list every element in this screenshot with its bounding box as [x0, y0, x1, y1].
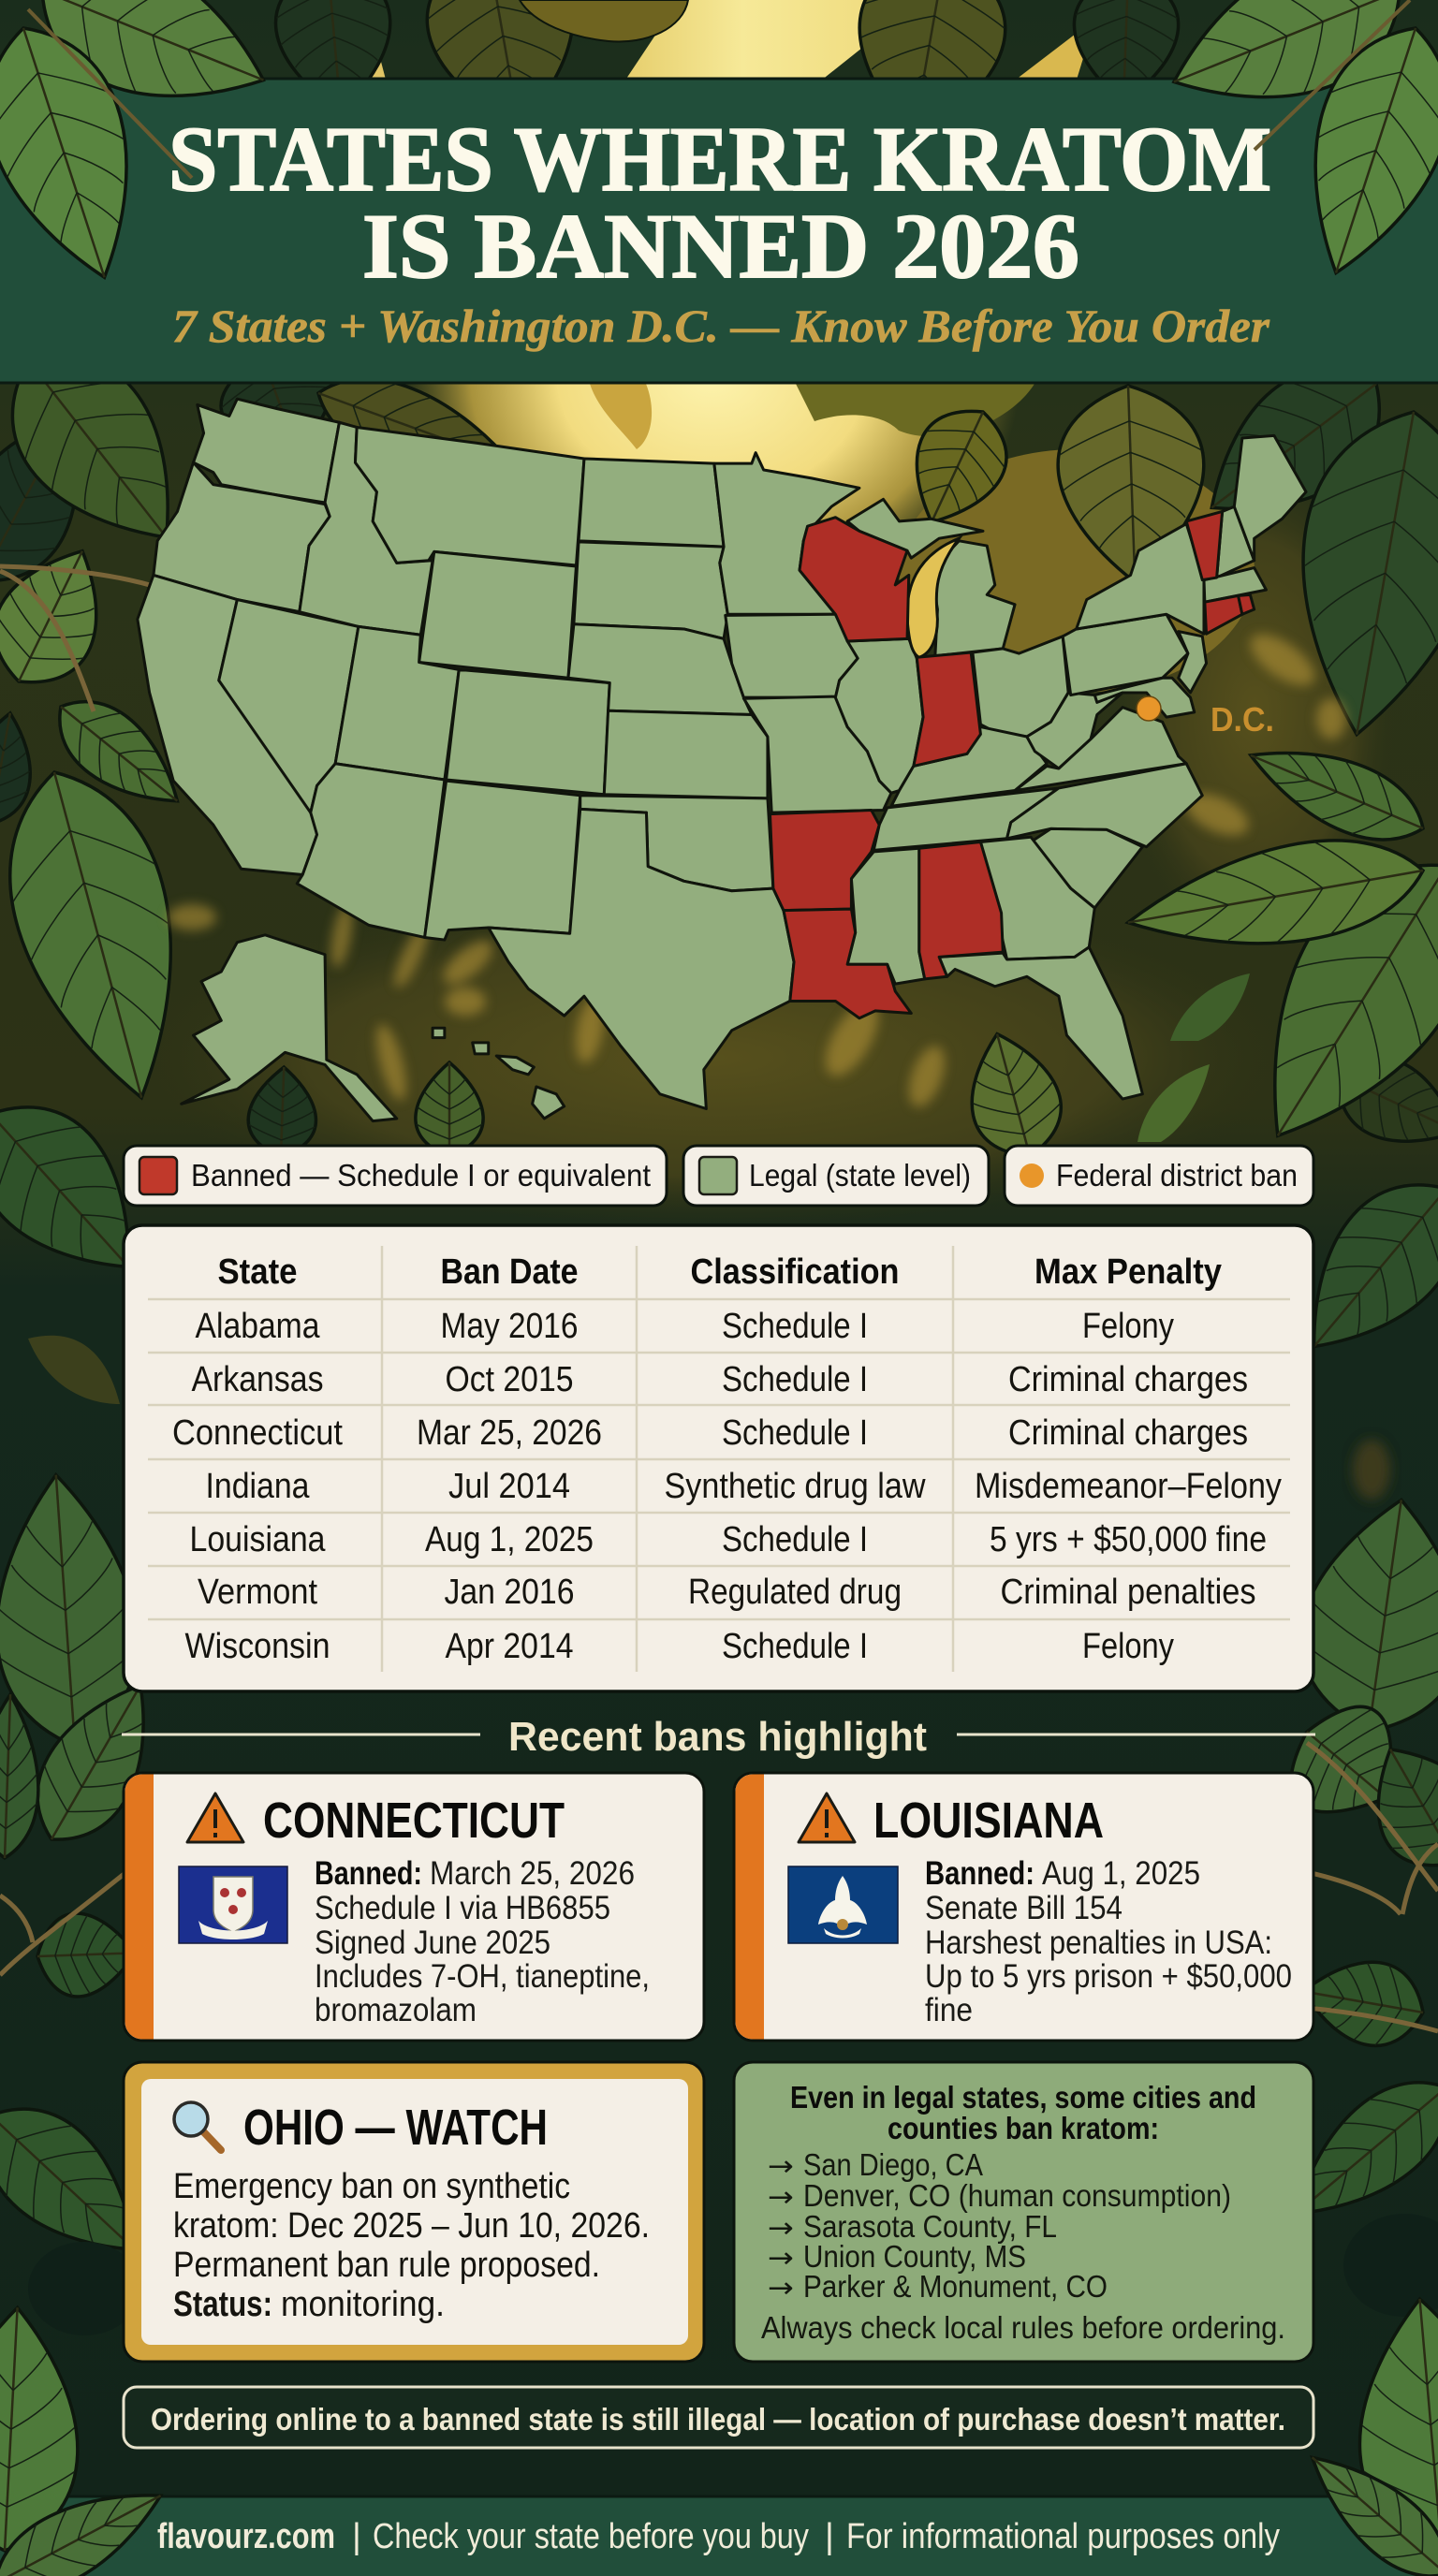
table header: Max Penalty: [1034, 1252, 1222, 1292]
footer: Check your state before you buy: [373, 2517, 809, 2556]
table header: State: [217, 1252, 298, 1292]
legend: [124, 1146, 1313, 1206]
title: IS BANNED 2026: [362, 196, 1079, 298]
row: Arkansas: Oct 2015: [446, 1360, 573, 1399]
row: Vermont: Criminal penalties: [1000, 1573, 1256, 1612]
heading: CONNECTICUT: [263, 1793, 565, 1849]
row: Louisiana: Schedule I: [722, 1520, 868, 1559]
icon: Connecticut flag: [179, 1866, 287, 1943]
Lake Michigan: [907, 538, 959, 657]
row: Alabama: May 2016: [440, 1307, 579, 1346]
state: Rhode Island: [1239, 594, 1255, 614]
row: Arkansas: Arkansas: [191, 1360, 324, 1399]
heading: LOUISIANA: [873, 1793, 1104, 1849]
details: March 25, 2026: [430, 1855, 635, 1892]
row: Wisconsin: Apr 2014: [446, 1627, 573, 1666]
table header: [217, 1252, 1222, 1292]
details: Harshest penalties in USA:: [925, 1925, 1272, 1961]
heading: OHIO — WATCH: [243, 2100, 548, 2156]
state: Vermont: [1186, 511, 1223, 580]
row: Louisiana: Aug 1, 2025: [425, 1520, 594, 1559]
details: fine: [925, 1992, 973, 2028]
legend: federal district: Federal district ban: [1056, 1158, 1298, 1193]
row: Alabama: Felony: [1082, 1307, 1174, 1346]
section heading: Recent bans highlight: [508, 1714, 927, 1760]
warning bar: Ordering online to a banned state is still illegal — location of purchase doesn’t matter.: [151, 2402, 1285, 2437]
legend: banned: [124, 1146, 667, 1206]
row: Louisiana: 5 yrs + $50,000 fine: [990, 1520, 1267, 1559]
body text: Status:: [173, 2285, 272, 2324]
icon: Louisiana flag: [788, 1866, 898, 1943]
details: [315, 1855, 650, 2028]
footer: For informational purposes only: [846, 2517, 1280, 2556]
banned states: [770, 511, 1255, 1018]
details: Includes 7-OH, tianeptine,: [315, 1958, 650, 1995]
details: Banned:: [925, 1855, 1034, 1892]
details: Senate Bill 154: [925, 1890, 1123, 1926]
body text: kratom: Dec 2025 – Jun 10, 2026.: [173, 2206, 650, 2246]
corner leaves over header: [0, 0, 1438, 298]
details: Schedule I via HB6855: [315, 1890, 610, 1926]
foliage: sides of lower panels: [0, 1074, 1438, 2335]
card: Ohio watch: [124, 2062, 704, 2362]
D.C. label: D.C.: [1211, 700, 1274, 739]
state: Wisconsin: [800, 518, 909, 641]
row: Arkansas: Schedule I: [722, 1360, 868, 1399]
row: Arkansas: [191, 1360, 1248, 1399]
footer: |: [352, 2517, 361, 2556]
city list: Union County, MS: [803, 2239, 1026, 2274]
subtitle: 7 States + Washington D.C. — Know Before You Order: [172, 300, 1270, 352]
row: Wisconsin: Felony: [1082, 1627, 1174, 1666]
table panel: [124, 1225, 1313, 1691]
row: Connecticut: Mar 25, 2026: [417, 1413, 602, 1453]
row: Connecticut: Criminal charges: [1008, 1413, 1248, 1453]
icon: warning: [799, 1793, 855, 1842]
title: [169, 109, 1271, 298]
note: Always check local rules before ordering.: [761, 2310, 1285, 2345]
footer: [0, 2496, 1438, 2576]
D.C. marker: [1137, 696, 1161, 721]
state: Indiana: [914, 652, 980, 766]
foliage: top and map area: [0, 0, 1438, 1178]
body text: Emergency ban on synthetic: [173, 2167, 570, 2206]
legend: federal district: [1005, 1146, 1313, 1206]
heading: Even in legal states, some cities and: [790, 2080, 1256, 2115]
city list: →: [768, 2272, 794, 2305]
heading: [790, 2080, 1256, 2145]
details: bromazolam: [315, 1992, 477, 2028]
legend: legal: [683, 1146, 989, 1206]
city list: Sarasota County, FL: [803, 2209, 1057, 2244]
state: Connecticut: [1205, 595, 1242, 634]
header band: [0, 79, 1438, 383]
body text: Permanent ban rule proposed.: [173, 2246, 600, 2285]
row: Connecticut: Schedule I: [722, 1413, 868, 1453]
dappled light spots: [168, 624, 1346, 1111]
row: Wisconsin: Wisconsin: [185, 1627, 330, 1666]
icon: magnifier: [174, 2102, 221, 2150]
state: Louisiana: [784, 909, 911, 1018]
city list: [768, 2147, 1231, 2305]
city list: →: [768, 2242, 794, 2275]
row: Louisiana: [189, 1520, 1267, 1559]
row: Indiana: Jul 2014: [448, 1467, 570, 1506]
state: Arkansas: [770, 810, 879, 911]
city list: Parker & Monument, CO: [803, 2269, 1108, 2304]
details: Aug 1, 2025: [1042, 1855, 1200, 1892]
row: Indiana: Synthetic drug law: [665, 1467, 926, 1506]
row: Connecticut: [172, 1413, 1248, 1453]
table header: Classification: [691, 1252, 899, 1292]
row: Indiana: [206, 1467, 1282, 1506]
legal states: [138, 399, 1306, 1121]
card: Louisiana: [734, 1773, 1313, 2041]
card: Connecticut: [124, 1773, 704, 2041]
row: Louisiana: Louisiana: [189, 1520, 326, 1559]
row: Indiana: Misdemeanor–Felony: [975, 1467, 1282, 1506]
row: Vermont: Jan 2016: [444, 1573, 575, 1612]
row: Wisconsin: [185, 1627, 1174, 1666]
heading: counties ban kratom:: [888, 2111, 1159, 2145]
warning bar: [124, 2387, 1313, 2448]
table header: Ban Date: [440, 1252, 579, 1292]
foliage: bottom corners: [0, 2292, 1438, 2576]
details: Banned:: [315, 1855, 422, 1892]
US map: [138, 399, 1306, 1121]
city list: →: [768, 2212, 794, 2245]
details: Up to 5 yrs prison + $50,000: [925, 1958, 1292, 1995]
footer: |: [825, 2517, 834, 2556]
row: Connecticut: Connecticut: [172, 1413, 343, 1453]
row: Alabama: Alabama: [195, 1307, 320, 1346]
city list: →: [768, 2150, 794, 2183]
row: Alabama: Schedule I: [722, 1307, 868, 1346]
legend: legal: Legal (state level): [749, 1158, 971, 1193]
card: local bans: [734, 2062, 1313, 2362]
row: Vermont: Regulated drug: [688, 1573, 902, 1612]
body text: [173, 2167, 650, 2324]
icon: warning: [187, 1793, 243, 1842]
row: Vermont: [198, 1573, 1256, 1612]
title: STATES WHERE KRATOM: [169, 109, 1271, 211]
body text: monitoring.: [281, 2285, 445, 2324]
details: Signed June 2025: [315, 1925, 550, 1961]
legend: banned: Banned — Schedule I or equivalent: [191, 1158, 651, 1193]
row: Vermont: Vermont: [198, 1573, 317, 1612]
row: Indiana: Indiana: [206, 1467, 310, 1506]
row: Arkansas: Criminal charges: [1008, 1360, 1248, 1399]
row: Alabama: [195, 1307, 1174, 1346]
city list: Denver, CO (human consumption): [803, 2178, 1231, 2213]
city list: →: [768, 2181, 794, 2214]
details: [925, 1855, 1292, 2028]
state: Alabama: [919, 842, 1003, 979]
row: Wisconsin: Schedule I: [722, 1627, 868, 1666]
city list: San Diego, CA: [803, 2147, 983, 2182]
footer: flavourz.com: [157, 2517, 335, 2556]
